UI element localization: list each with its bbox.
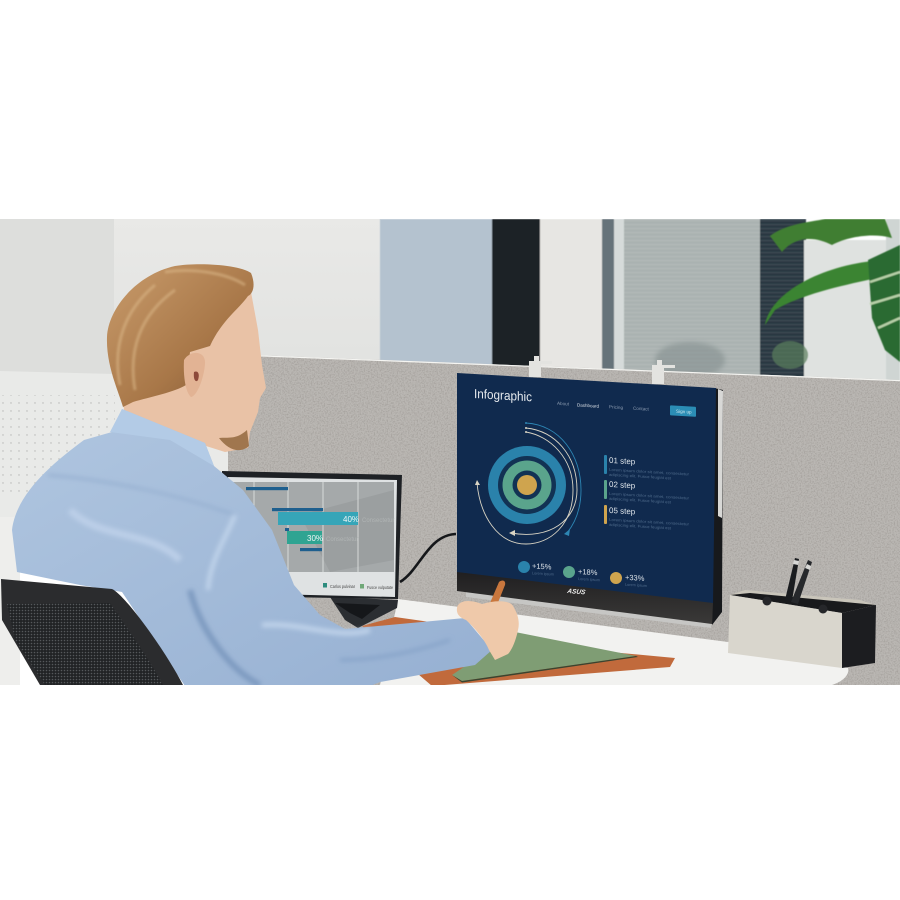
person <box>1 264 519 686</box>
stat +18%: Lorem ipsum <box>578 577 600 582</box>
laptop keyboard <box>335 603 380 619</box>
window and pillar <box>380 219 900 385</box>
left white partition panel <box>0 371 228 687</box>
background wall <box>0 219 381 374</box>
step 05: Lorem ipsum dolor sit amet, consectetur <box>609 518 690 527</box>
photograph <box>0 219 900 690</box>
chair <box>1 579 183 685</box>
brand logo: ASUS <box>566 588 587 596</box>
photo scene <box>0 219 900 685</box>
orange desk pad <box>362 617 675 686</box>
step 02: Lorem ipsum dolor sit amet, consectetur <box>609 492 690 501</box>
laptop chart: 40% <box>343 515 359 524</box>
step 05 <box>609 507 689 530</box>
laptop legend <box>323 583 393 590</box>
pens <box>785 558 812 604</box>
laptop legend: Fusce vulputate <box>367 585 393 590</box>
cable <box>400 534 456 582</box>
folder shadow edge <box>452 656 638 682</box>
shirt <box>12 409 492 686</box>
display panel <box>457 373 716 604</box>
step 01 <box>609 457 689 480</box>
step 05: adipiscing elit. Fusce feugiat est <box>609 523 672 530</box>
desk <box>380 599 848 685</box>
stat circles <box>518 561 622 584</box>
laptop screen <box>228 477 397 597</box>
beard <box>219 430 249 450</box>
stat +33%: +33% <box>625 573 645 583</box>
box front <box>728 595 842 668</box>
ear <box>184 353 205 397</box>
hair <box>107 264 254 407</box>
hand <box>457 601 519 660</box>
grey felt partition <box>228 350 900 690</box>
step 02: adipiscing elit. Fusce feugiat est <box>609 497 672 504</box>
laptop chart <box>232 482 394 572</box>
shirt creases <box>48 475 450 685</box>
shirt collar <box>110 409 214 466</box>
neck and face <box>123 292 266 465</box>
screen navigation: Contact <box>633 406 650 412</box>
step 05: 05 step <box>609 506 636 516</box>
circular arrows <box>477 423 581 544</box>
laptop chart: Consectetur <box>362 518 394 524</box>
silver bottom strip <box>466 591 712 628</box>
screen text <box>474 386 696 591</box>
sign up button <box>670 405 696 417</box>
laptop lid <box>222 471 402 599</box>
laptop chart: 30% <box>307 534 323 543</box>
screen navigation: Pricing <box>609 404 623 410</box>
bottom bezel <box>457 572 713 624</box>
sign up button: Sign up <box>676 409 692 415</box>
step colour bars <box>604 455 607 524</box>
screen navigation: About <box>557 401 570 407</box>
stat +15%: +15% <box>532 561 552 571</box>
arrowheads <box>475 422 570 536</box>
stat +15%: Lorem ipsum <box>532 571 554 577</box>
step 02 <box>609 481 689 504</box>
box side <box>842 605 876 668</box>
laptop <box>222 471 402 628</box>
stat +15% <box>532 564 554 576</box>
box interior <box>730 593 876 613</box>
green folder <box>452 632 636 681</box>
step 01: Lorem ipsum dolor sit amet, consectetur <box>609 468 690 477</box>
screen navigation: Dashboard <box>577 402 599 409</box>
monitor side <box>712 388 723 625</box>
laptop base <box>330 597 398 628</box>
monitor <box>457 373 723 628</box>
laptop legend: Carlos pulvinar <box>330 584 355 589</box>
stat +18% <box>578 569 600 582</box>
monitor stand strip <box>718 389 723 518</box>
stat +33%: Lorem ipsum <box>625 583 647 588</box>
stat +18%: +18% <box>578 567 598 577</box>
stat +33% <box>625 574 647 588</box>
screen title: Infographic <box>474 386 532 404</box>
pencil <box>490 581 505 605</box>
step 01: adipiscing elit. Fusce feugiat est <box>609 473 672 480</box>
laptop chart: Consectetur <box>326 537 358 543</box>
screen navigation <box>557 402 649 411</box>
monitor clips <box>529 356 675 384</box>
plant <box>765 219 900 369</box>
concentric rings chart <box>475 422 581 544</box>
inner ear <box>194 371 199 381</box>
hair highlights <box>118 271 245 390</box>
step 01: 01 step <box>609 456 636 466</box>
step 02: 02 step <box>609 480 636 490</box>
box back rim <box>730 590 876 605</box>
pen holder box <box>728 558 876 668</box>
